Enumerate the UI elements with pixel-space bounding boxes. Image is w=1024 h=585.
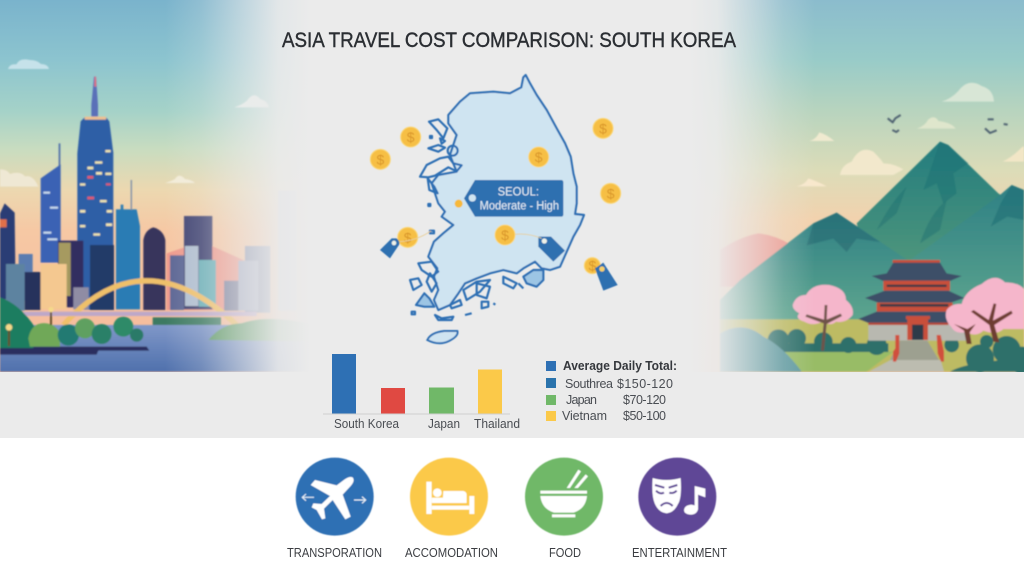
- temple: [858, 260, 967, 372]
- cloud: upper left: [8, 59, 49, 69]
- map: South Korea: $: [535, 149, 543, 165]
- mountain: pink distant: [720, 233, 792, 287]
- icon: food: [525, 458, 603, 536]
- legend: average daily total: Vietnam: [562, 409, 607, 423]
- bar chart: [323, 354, 520, 431]
- icon: airplane: [311, 477, 354, 519]
- mountain: centre peak: [856, 141, 1001, 304]
- price tag: centre: [515, 234, 565, 262]
- map: South Korea: $: [599, 120, 607, 136]
- map: South Korea: $: [588, 258, 596, 274]
- icon: transportation: [296, 458, 374, 536]
- price tag: right: [595, 263, 618, 291]
- cherry tree: right: [946, 278, 1024, 344]
- icon: bowl and chopsticks: [540, 470, 588, 517]
- callout: Seoul: [464, 180, 563, 217]
- coins: [370, 118, 621, 274]
- map: South Korea: [370, 75, 621, 343]
- map: islands: [410, 119, 543, 320]
- skyscraper: angled tower: [41, 143, 61, 263]
- mountain backdrop: [167, 247, 243, 310]
- legend: average daily total: $50-100: [623, 409, 666, 423]
- legend: average daily total: $70-120: [623, 393, 666, 407]
- meadow: [720, 319, 1024, 372]
- cloud: left horizon: [0, 169, 38, 187]
- map: South Korea: $: [404, 229, 412, 245]
- label: food: FOOD: [549, 546, 581, 560]
- panel: Seoul skyline scene: [0, 0, 320, 372]
- bushes: [720, 327, 1024, 373]
- label: transportation: TRANSPORATION: [287, 546, 382, 560]
- panel: mountain and temple scene: [690, 0, 1024, 373]
- legend: average daily total: Average Daily Total:: [563, 359, 677, 373]
- title: ASIA TRAVEL COST COMPARISON: SOUTH KOREA: [282, 29, 736, 52]
- bar chart: South Korea: [334, 417, 399, 431]
- mountain: left peak: [720, 213, 920, 323]
- cherry tree: left: [793, 285, 853, 351]
- label: entertainment: ENTERTAINMENT: [632, 546, 727, 560]
- mountain: right peak: [912, 184, 1024, 304]
- legend: average daily total: [546, 359, 677, 423]
- birds: [888, 115, 1008, 133]
- icon: bed: [426, 482, 474, 514]
- buildings: left edge: [0, 203, 16, 299]
- map: mainland: [428, 75, 584, 310]
- icon: entertainment: [638, 458, 716, 536]
- skyscraper: tall tower: [77, 77, 113, 310]
- river: [0, 325, 320, 372]
- legend: average daily total: $150-120: [617, 377, 673, 391]
- bar chart: Japan: [428, 417, 460, 431]
- price tag: left: [380, 231, 431, 258]
- Seoul marker: [455, 200, 463, 208]
- callout: Seoul: Moderate - High: [480, 199, 559, 213]
- buildings: mid-rise: [58, 241, 83, 307]
- arch bridge: [23, 281, 257, 325]
- map: Jeju island: [427, 331, 458, 343]
- map: South Korea: $: [607, 185, 615, 201]
- map: South Korea: $: [501, 227, 509, 243]
- legend: average daily total: Southrea: [565, 377, 613, 391]
- bar chart: Thailand: [474, 417, 520, 431]
- trees and riverbank: [0, 297, 320, 355]
- icon: theatre mask: [652, 478, 681, 513]
- callout: Seoul: SEOUL:: [498, 184, 539, 198]
- legend: average daily total: Japan: [566, 393, 597, 407]
- label: accommodation: ACCOMODATION: [405, 546, 498, 560]
- map: South Korea: $: [376, 151, 384, 167]
- clouds: [797, 83, 1024, 186]
- map: South Korea: $: [407, 129, 415, 145]
- icon: accommodation: [410, 458, 488, 536]
- icon: music note: [684, 486, 705, 515]
